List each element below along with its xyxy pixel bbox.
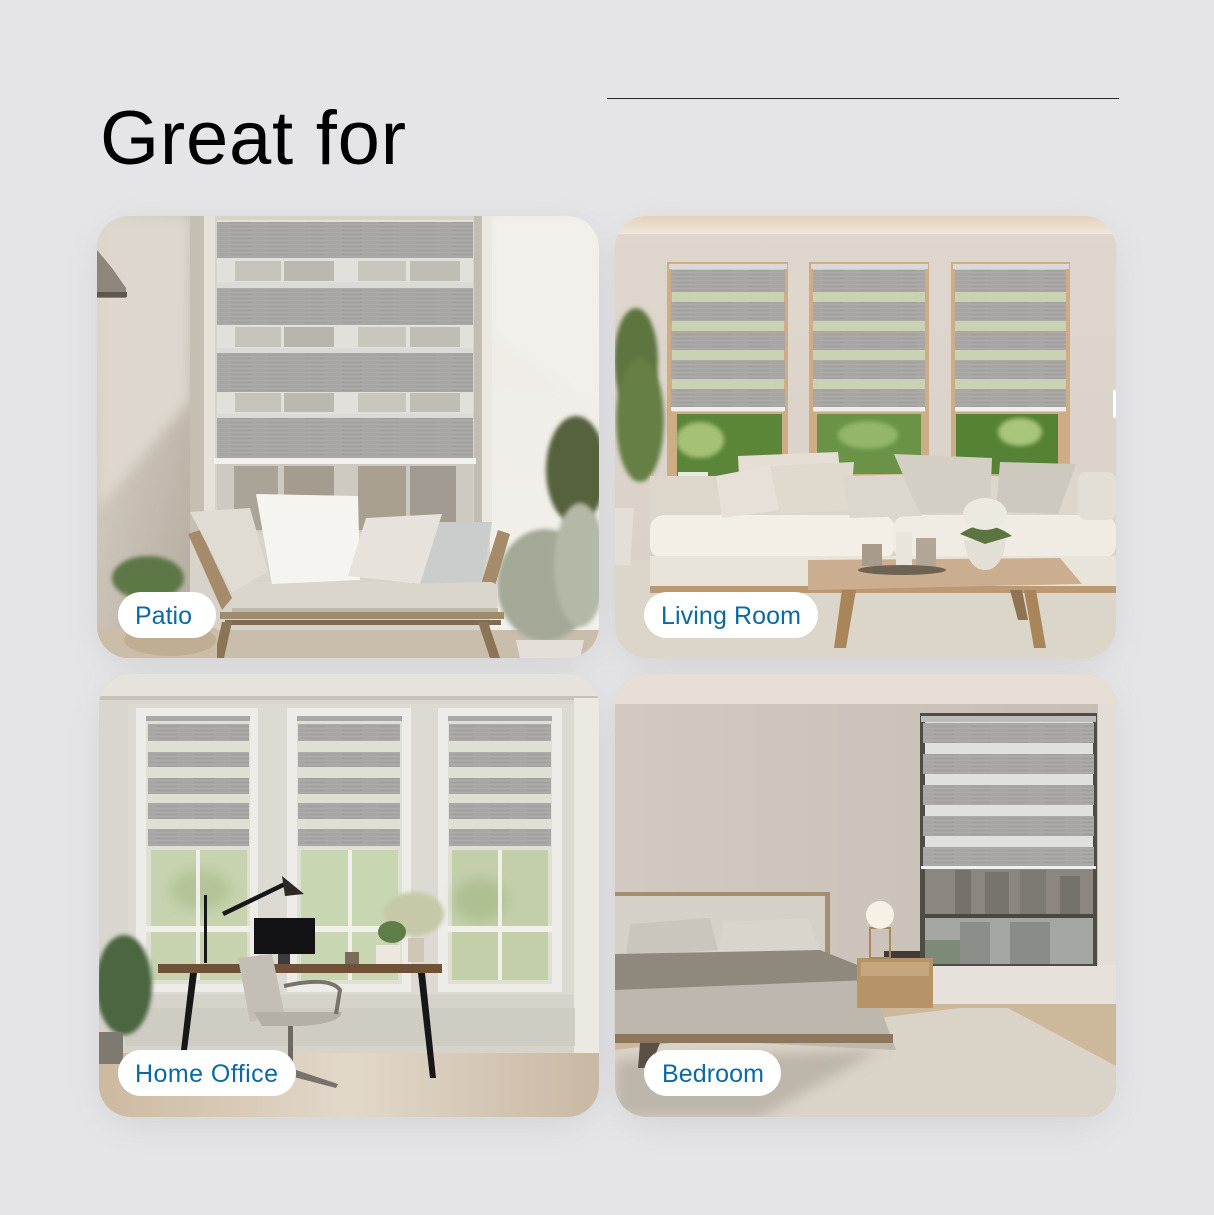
desk — [158, 876, 444, 1078]
title: Great for — [100, 96, 406, 181]
label: Bedroom: Bedroom — [662, 1060, 764, 1088]
chair — [238, 954, 342, 1088]
office wall — [99, 674, 599, 1053]
wall lamp — [97, 250, 127, 298]
panel: living room — [614, 216, 1116, 658]
nightstand and lamp — [857, 901, 933, 1008]
office plant — [96, 935, 152, 1064]
patio walls — [97, 216, 599, 658]
label: Living Room: Living Room — [661, 602, 801, 630]
bedroom window — [920, 713, 1097, 966]
label: Home Office — [118, 1050, 296, 1096]
office blinds — [146, 716, 552, 846]
patio plants right — [497, 416, 606, 658]
label: Bedroom — [644, 1050, 781, 1096]
patio plant left — [97, 556, 217, 658]
panel: home office — [96, 674, 599, 1117]
panel: patio — [97, 216, 606, 658]
office floor — [99, 1053, 599, 1117]
bedroom wall — [615, 674, 1116, 1004]
label: Patio — [118, 592, 216, 638]
bedroom floor — [615, 1004, 1116, 1117]
tree — [614, 308, 664, 565]
office windows — [136, 708, 562, 992]
living room blinds — [669, 264, 1069, 411]
living room sofa — [650, 452, 1116, 593]
patio sofa — [188, 494, 510, 658]
label: Living Room — [644, 592, 818, 638]
window panes — [217, 220, 473, 532]
bed — [615, 892, 896, 1068]
living room wall — [615, 216, 1116, 560]
panel: bedroom — [615, 674, 1116, 1117]
patio blind — [214, 222, 476, 464]
bedroom blind — [921, 716, 1096, 869]
header rule — [607, 98, 1119, 99]
label: Patio: Patio — [135, 602, 192, 630]
coffee table — [808, 498, 1082, 648]
living room windows — [667, 262, 1070, 476]
label: Home Office: Home Office — [135, 1060, 278, 1088]
living room floor — [615, 560, 1116, 658]
